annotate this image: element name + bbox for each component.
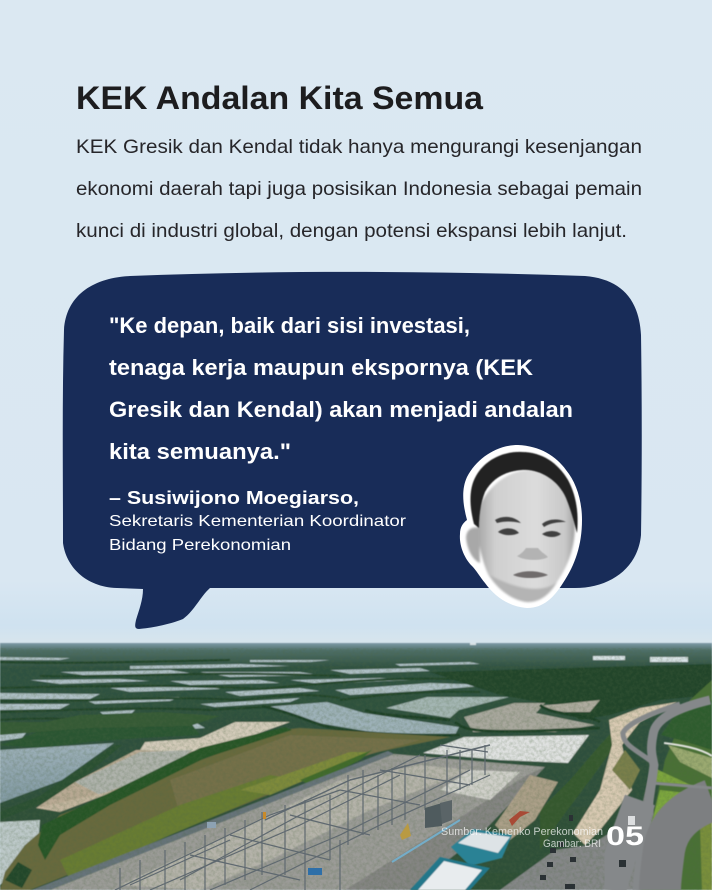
right ground and parking	[500, 770, 660, 890]
blue fence line	[392, 820, 460, 862]
intro text block: kunci di industri global, dengan potensi ekspansi lebih lanjut.	[76, 220, 627, 242]
portrait: Susiwijono Moegiarso	[460, 445, 582, 608]
aerial photo: industrial estate and fish ponds	[0, 643, 712, 890]
tree belt upper right	[430, 664, 712, 720]
source credit: Sumber: Kemenko Perekonomian	[441, 826, 603, 838]
attribution: Sekretaris Kementerian Koordinator	[109, 513, 407, 530]
crane and vehicles	[207, 811, 530, 875]
transformer block	[425, 803, 442, 828]
large pond centre	[264, 702, 459, 735]
portrait hair	[470, 452, 578, 533]
speech bubble panel	[63, 272, 642, 629]
parked cars	[540, 815, 626, 889]
portrait white outline	[460, 445, 582, 608]
lower left water	[0, 820, 40, 885]
sand flat	[36, 750, 195, 810]
distant wetland base	[0, 643, 712, 890]
source credit	[441, 826, 603, 850]
tree lines around ponds	[262, 705, 600, 735]
scrub field	[0, 728, 450, 890]
sand strip right	[573, 702, 677, 845]
page number: 05	[606, 821, 644, 851]
distant buildings	[470, 643, 688, 662]
intro text block: KEK Gresik dan Kendal tidak hanya mengurangi kesenjangan	[76, 136, 642, 158]
portrait ear	[466, 527, 480, 563]
portrait lower face shading	[488, 574, 557, 602]
quote text: tenaga kerja maupun ekspornya (KEK	[109, 355, 534, 380]
white ground behind substation	[423, 735, 589, 763]
intro text block: ekonomi daerah tapi juga posisikan Indonesia sebagai pemain	[76, 178, 642, 200]
left lake	[0, 743, 114, 803]
quote text	[109, 313, 573, 464]
portrait mouth	[513, 571, 548, 578]
intro text block	[76, 136, 642, 242]
substation steel frames	[115, 745, 490, 890]
green belt by road	[540, 730, 614, 850]
attribution: Bidang Perekonomian	[109, 537, 291, 554]
work yard	[495, 775, 558, 840]
portrait eyebrows and eyes	[495, 517, 566, 537]
attribution: – Susiwijono Moegiarso,	[109, 488, 359, 508]
tree band beside left lake	[14, 746, 120, 807]
quote text: kita semuanya."	[109, 439, 291, 464]
white truck	[628, 816, 635, 825]
source credit: Gambar: BRI	[543, 838, 601, 850]
title: KEK Andalan Kita Semua	[76, 80, 483, 116]
tree rows between ponds	[0, 660, 480, 720]
quote text: Gresik dan Kendal) akan menjadi andalan	[109, 397, 573, 422]
sand pond right	[464, 703, 595, 732]
substation gravel ground	[50, 754, 545, 890]
portrait nose	[517, 548, 548, 560]
building 2	[410, 857, 490, 890]
pond centre right	[386, 697, 509, 718]
background	[0, 0, 712, 645]
right vegetation	[640, 680, 712, 890]
substation wall	[32, 751, 394, 890]
roads	[610, 700, 712, 890]
tree band on field edge	[38, 727, 292, 860]
wetlands trees left	[4, 724, 198, 747]
attribution	[109, 488, 407, 554]
quote text: "Ke depan, baik dari sisi investasi,	[109, 313, 470, 338]
building 1	[451, 829, 512, 866]
pond strips in the distance	[0, 656, 480, 742]
portrait face	[478, 470, 575, 602]
foliage noise texture	[0, 648, 712, 890]
